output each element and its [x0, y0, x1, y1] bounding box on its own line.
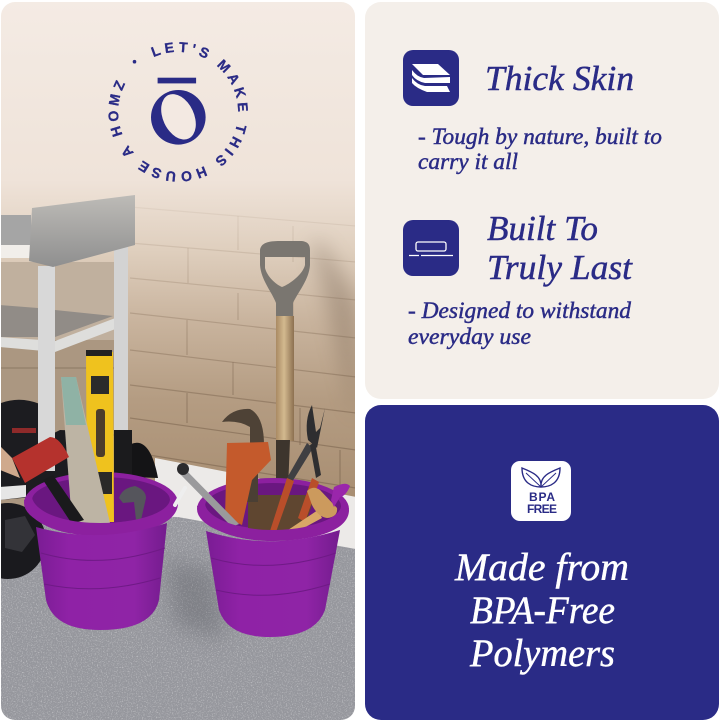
icon: bpa free: FREE: [527, 502, 557, 516]
heading: made from bpa-free polymers: Polymers: [469, 632, 615, 675]
left bucket: [0, 350, 185, 630]
rim back: [197, 478, 349, 532]
saw: [61, 377, 110, 523]
tin snips: [287, 443, 311, 480]
icon: thickness: [403, 220, 459, 276]
shovel: [260, 241, 310, 490]
rim back: [24, 472, 178, 523]
text: tough by nature: [418, 124, 662, 174]
heading: made from bpa-free polymers: [454, 546, 629, 675]
logo mark: [151, 78, 206, 145]
text: tough by nature: - Tough by nature, built to: [418, 124, 662, 149]
panel: bpa free: [365, 405, 719, 720]
heading: made from bpa-free polymers: Made from: [454, 546, 629, 589]
wooden hammer: [289, 511, 322, 530]
baseboard: [155, 458, 356, 552]
front rim: [197, 504, 349, 541]
black storage box: [1, 400, 68, 500]
right bucket: [177, 405, 350, 637]
wall shadow behind shovel: [310, 240, 355, 388]
heading: thick skin: Thick Skin: [485, 59, 634, 98]
logo badge: [108, 42, 248, 182]
icon: layers: [403, 50, 459, 106]
left back area: [1, 262, 114, 324]
icon: bpa free: BPA: [529, 490, 555, 504]
golf club: [119, 486, 146, 520]
heading: built to truly last: Built To: [487, 209, 598, 248]
heading: built to truly last: Truly Last: [487, 248, 633, 287]
panel: product photo: [0, 0, 356, 720]
floor: [0, 515, 356, 720]
wheel: [0, 503, 46, 579]
body: [36, 523, 167, 630]
table legs: [38, 266, 55, 471]
body: [206, 530, 340, 637]
heading: built to truly last: [487, 209, 633, 287]
bucket shadows on floor: [165, 560, 225, 640]
text: designed to withstand: [408, 298, 631, 349]
mallet: [44, 478, 84, 522]
front rim: [24, 498, 178, 536]
text: tough by nature: carry it all: [418, 149, 518, 174]
heading: made from bpa-free polymers: BPA-Free: [470, 589, 615, 632]
text: designed to withstand: everyday use: [408, 324, 531, 349]
table shelf: [0, 305, 113, 337]
socket wrench: [180, 472, 239, 526]
level: [86, 350, 114, 522]
pipe wrench: [222, 409, 264, 445]
icon: bpa free: [511, 461, 571, 521]
canvas bag: [248, 495, 315, 530]
text: designed to withstand: - Designed to withstand: [408, 298, 631, 323]
circular slogan: LET'S MAKE THIS HOUSE A HOMZ: [108, 42, 248, 182]
table top: [0, 215, 31, 245]
wall: [1, 2, 355, 497]
panel: features: [365, 2, 719, 399]
brick courses: [130, 207, 356, 488]
